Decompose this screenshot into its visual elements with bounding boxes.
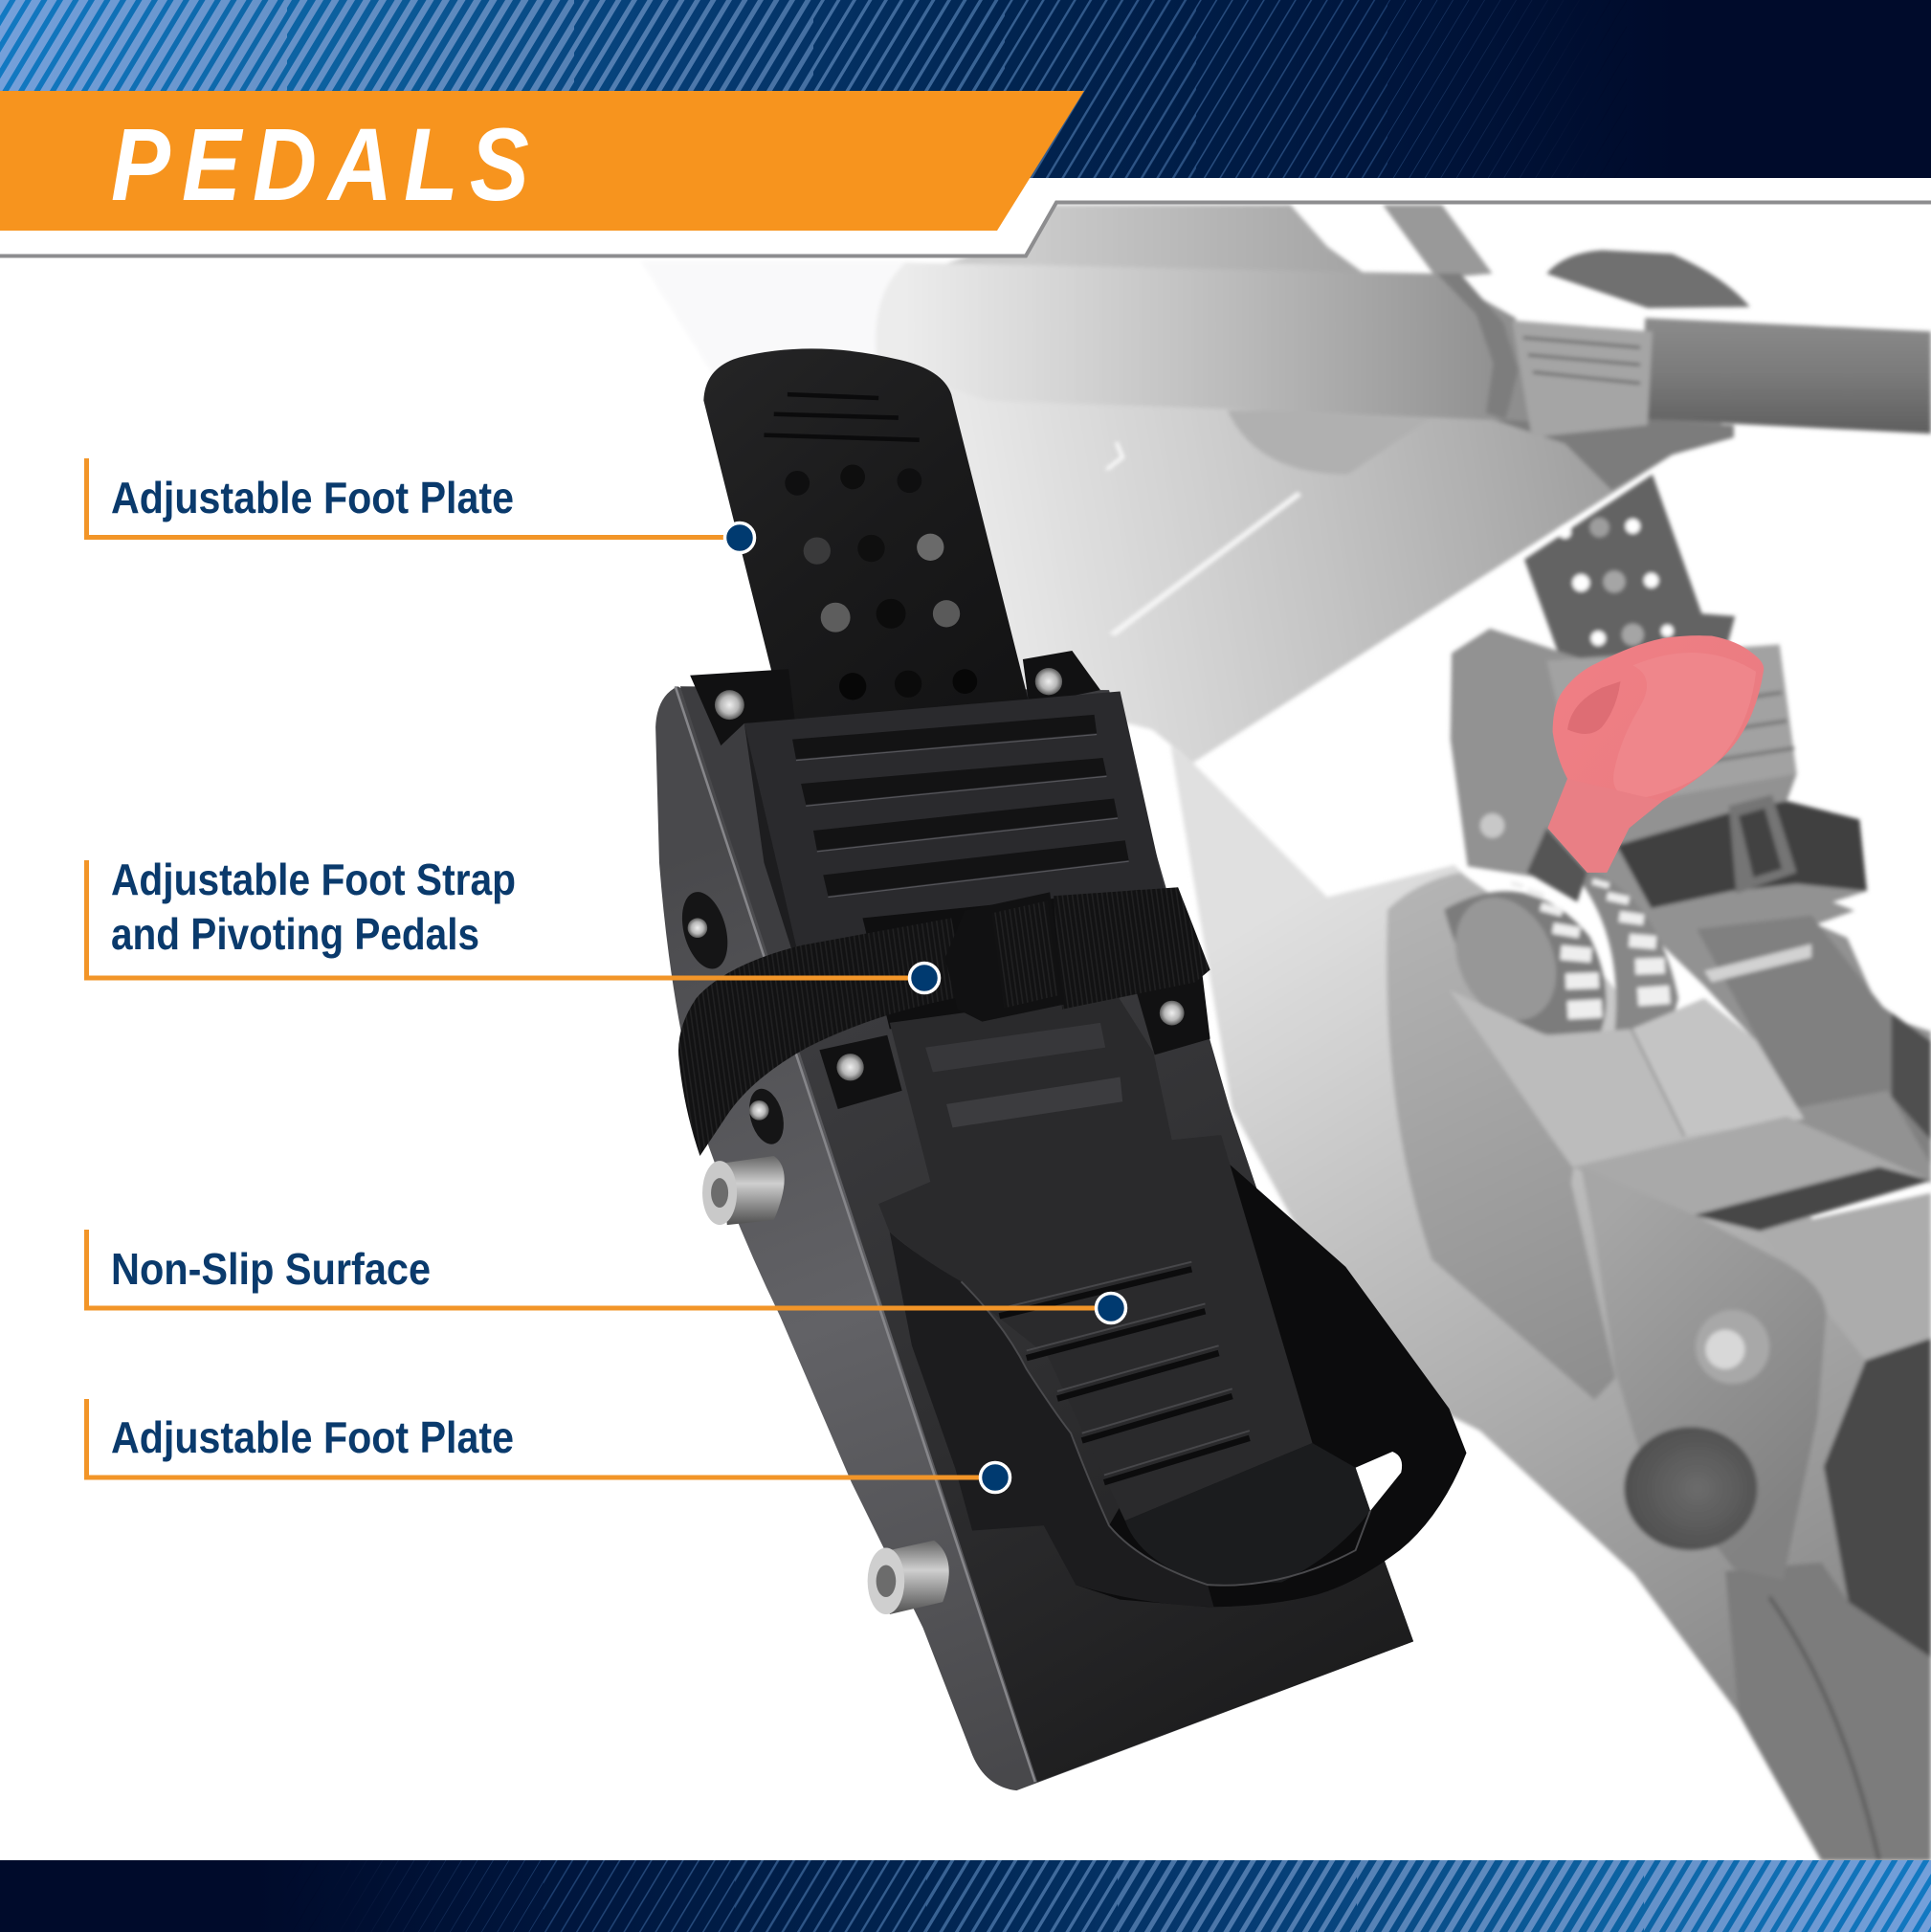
callout: adjustable foot plate (bottom) bbox=[86, 1399, 1010, 1493]
lower bolt: lower bbox=[868, 1541, 949, 1614]
side plate edge highlight bbox=[676, 686, 1035, 1782]
far pedal cover bbox=[1546, 645, 1797, 798]
label: Adjustable Foot Plate bbox=[111, 1412, 514, 1462]
lower dark edge under rail bbox=[1454, 407, 1734, 491]
heel cup rim highlight bbox=[961, 1281, 1370, 1586]
far pedal strap bbox=[1617, 801, 1867, 908]
resistance dial left bbox=[1444, 891, 1607, 1035]
heel cup side wall bbox=[890, 1232, 1213, 1607]
title: PEDALS bbox=[111, 107, 529, 223]
far buckle bbox=[1729, 795, 1797, 894]
light console plates bbox=[1449, 989, 1684, 1167]
red resistance knob bbox=[1547, 635, 1764, 873]
knob grip panel bbox=[1613, 653, 1756, 798]
plate ridges bbox=[764, 394, 920, 440]
top clip bbox=[1546, 250, 1750, 308]
label: Adjustable Foot Strap bbox=[111, 855, 516, 904]
strap bbox=[678, 887, 1210, 1156]
lower machine body bbox=[1170, 745, 1931, 1861]
side pivot plates bbox=[675, 887, 789, 1148]
dial ticks bbox=[1510, 878, 1671, 1019]
slot bbox=[1695, 1167, 1931, 1232]
rail tube end bbox=[1760, 1193, 1931, 1361]
label: Adjustable Foot Plate bbox=[111, 473, 514, 522]
upper foot plate bbox=[703, 348, 1029, 740]
cover slot bbox=[862, 890, 1152, 1029]
clamp ridges bbox=[1523, 338, 1640, 384]
textured foot bed bbox=[878, 992, 1313, 1521]
dark block bbox=[1824, 1339, 1931, 1657]
pivot bracket bbox=[1581, 1167, 1827, 1580]
footer band bbox=[0, 1860, 1931, 1932]
header band bbox=[0, 0, 1931, 178]
label: Non-Slip Surface bbox=[111, 1244, 431, 1294]
opening through loop bbox=[1356, 1452, 1402, 1511]
lever stem bbox=[1527, 828, 1587, 902]
side plate bbox=[655, 686, 1413, 1790]
title banner bbox=[0, 91, 1084, 231]
resistance dial right bbox=[1581, 866, 1678, 1035]
lower bolt: upper bbox=[702, 1156, 785, 1225]
plate holes bbox=[785, 465, 977, 700]
main tube bbox=[876, 262, 1532, 421]
console mid box bbox=[1572, 1117, 1931, 1220]
beam crease highlight bbox=[1109, 492, 1301, 636]
near pedal bbox=[655, 348, 1466, 1790]
buckle bbox=[945, 892, 1065, 1022]
product photo bbox=[641, 205, 1931, 1861]
tube clamp bbox=[1512, 321, 1653, 437]
upper post bbox=[1383, 205, 1493, 278]
far foot plate bbox=[1501, 475, 1735, 672]
far foot bed bbox=[1697, 916, 1931, 1165]
marker dot bbox=[725, 522, 754, 553]
marker dot bbox=[1097, 1294, 1125, 1322]
stirrup loop bbox=[1076, 1165, 1466, 1607]
tube clamp strap bbox=[1437, 274, 1519, 419]
ghosted rowing machine background bbox=[641, 205, 1931, 1861]
callout: adjustable foot strap and pivoting pedals bbox=[86, 855, 940, 993]
callout: non-slip surface bbox=[86, 1230, 1125, 1322]
beam shadow oval bbox=[1228, 411, 1442, 475]
upper support blob bbox=[937, 205, 1367, 276]
header white strip and grey rule bbox=[0, 178, 1931, 256]
beam tick mark bbox=[1106, 442, 1122, 470]
lower brackets with screws bbox=[819, 967, 1210, 1109]
ribbed cover plate bbox=[744, 691, 1170, 1023]
non-slip ribs bbox=[999, 1269, 1250, 1482]
callout: adjustable foot plate (top) bbox=[86, 458, 754, 553]
marker dot bbox=[980, 1462, 1010, 1493]
housing bbox=[1387, 873, 1615, 1400]
pivot bolt bbox=[1696, 1310, 1769, 1384]
callout: adjustable foot strap and pivoting pedals: and Pivoting Pedals bbox=[111, 909, 479, 959]
knob stem shading bbox=[1547, 779, 1662, 873]
main beam bbox=[881, 351, 1734, 763]
rubber ball bumper bbox=[1624, 1427, 1757, 1550]
side plate inner face bbox=[680, 686, 1413, 1782]
far pedal body bbox=[1451, 629, 1931, 1183]
lower curved rail bbox=[1725, 1563, 1931, 1861]
narrow tube bbox=[1641, 318, 1931, 433]
marker dot bbox=[909, 963, 940, 993]
knob finger hollow bbox=[1567, 681, 1620, 734]
corner brackets with screws bbox=[690, 651, 1100, 745]
base plate behind loop bbox=[1125, 1443, 1370, 1585]
